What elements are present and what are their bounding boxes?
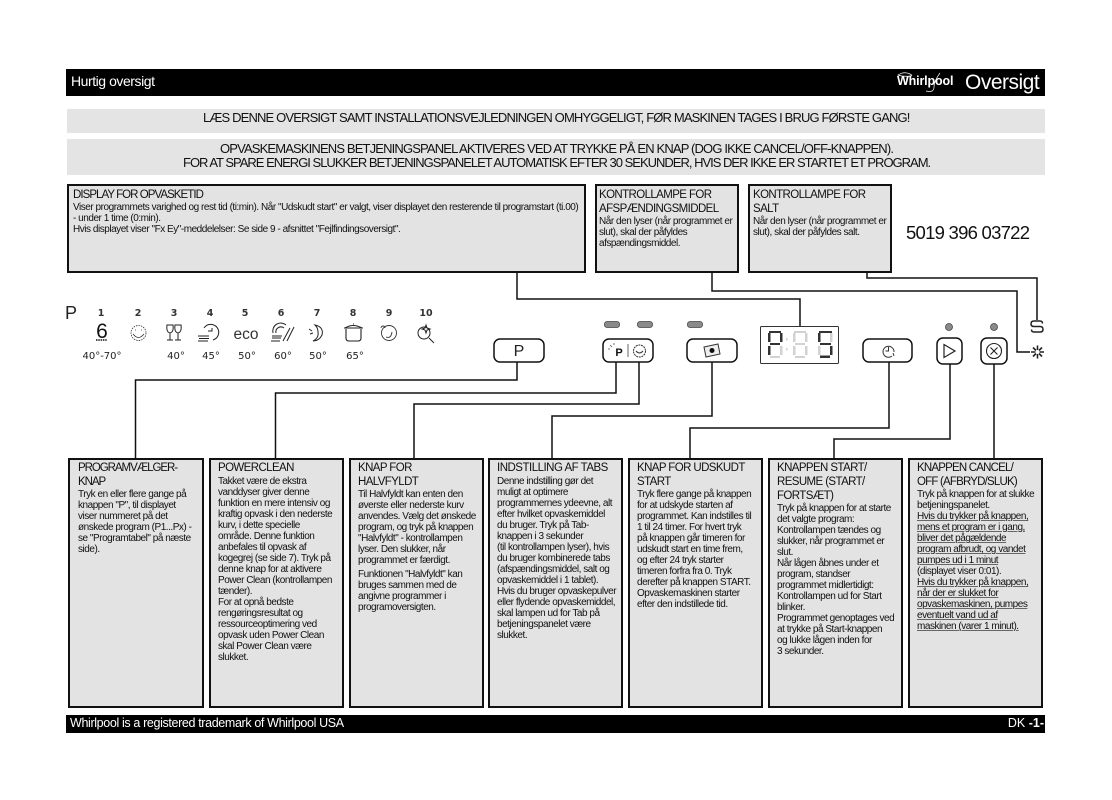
program numbers: 7 [314,308,320,319]
program numbers: 6 [278,308,285,319]
panel text: vanddyser giver denne [218,487,309,498]
display [760,326,838,364]
button: start [937,338,962,364]
panel text: kraftig opvask i den nederste [218,509,332,520]
button: delay [863,339,912,362]
panel text: Kontrollampen tændes og [777,525,881,536]
panel text [78,488,192,555]
panel text: på knappen går timeren for [637,533,745,544]
panel text: og efter 24 tryk starter [637,555,724,566]
connector: half load [414,362,639,458]
panel text: slut), skal der påfyldes [599,227,687,238]
button: cancel [981,338,1007,364]
program numbers: 9 [386,308,392,319]
connector: power clean [276,362,616,458]
header bar [66,69,1045,96]
panel text: blinker. [777,602,805,613]
panel heading [637,462,746,488]
button: P [494,339,544,362]
panel heading: KONTROLLAMPE FOR [599,189,711,201]
icon: salt S [1031,321,1043,332]
panel text: slukket. [497,630,527,641]
icon: program 9 plate with bubbles [381,326,396,340]
connector: salt panel to S [867,273,1037,320]
panel text: eventuelt vand ud af [917,610,998,621]
panel text: kogegrej (se side 7). Tryk på [218,553,331,564]
panel text: Opvaskemaskinen starter [637,588,740,599]
panel text: Tryk på knappen for at slukke [917,489,1034,500]
panel: power clean [209,458,344,708]
program row label: P [65,303,77,323]
panel text: Hvis displayet viser "Fx Ey"-meddelelser: Se side 9 - afsnittet "Fejlfindingsoversigt". [73,224,400,235]
program temperatures: 50° [238,351,256,362]
panel text: lyser. Den slukker, når [358,544,446,555]
panel: rinse aid lamp [595,184,739,273]
panel heading: KNAP FOR [358,462,412,474]
panel heading [917,462,1017,488]
panel text: rengøringsresultat og [218,608,303,619]
Whirlpool logo: Whirlpool [897,74,953,88]
program temperatures: 40°-70° [82,351,122,362]
panel text: side). [78,544,100,555]
panel text: viser nummeret på det [78,511,168,522]
icon: rinse aid star [1031,346,1044,358]
panel text: program, standser [777,569,850,580]
program temperatures: 45° [202,351,220,362]
panel heading [78,462,178,488]
connector: display panel to display [517,273,800,326]
panel heading: HALVFYLDT [358,476,418,488]
panel text: slukket. [218,652,248,663]
panel heading: KONTROLLAMPE FOR [753,189,865,201]
icon: program 10 magnifier [418,325,434,343]
panel heading: RESUME (START/ [777,476,865,488]
notice text: LÆS DENNE OVERSIGT SAMT INSTALLATIONSVEJLEDNINGEN OMHYGGELIGT, FØR MASKINEN TAGES I BRUG FØRSTE GANG! [203,110,910,125]
panel text [917,488,1034,632]
icon: program 3 glasses [167,325,181,340]
panel text: område. Denne funktion [218,531,314,542]
panel text: derefter på knappen START. [637,577,751,588]
panel text [753,216,887,238]
panel text: For at opnå bedste [218,597,294,608]
icon: program 4 plate [198,324,219,341]
panel heading: KNAPPEN START/ [777,462,867,474]
panel text: muligt at optimere [497,487,568,498]
panel text: maskinen (varer 1 minut). [917,621,1019,632]
connector: cancel [993,364,995,458]
panel text [73,202,578,235]
panel heading [753,189,866,215]
connector: rinse aid panel to star [712,273,1030,352]
panel text: funktion en mere intensiv og [218,498,330,509]
panel heading: PROGRAMVÆLGER- [78,462,177,474]
button: half load and power clean [603,339,653,362]
panel text: eller flydende opvaskemiddel, [497,597,615,608]
panel: tab setting [488,458,623,708]
icon: program 6 plates and cutlery [271,323,294,341]
panel text: Kontrollampen ud for Start [777,591,882,602]
panel: delayed start [628,458,763,708]
program temperatures: 40° [167,351,185,362]
panel text: Hvis du trykker på knappen, [917,577,1028,588]
panel text: Når lågen åbnes under et [777,558,879,569]
panel text: at trykke på Start-knappen [777,624,882,635]
icon: program 8 pot [344,324,363,341]
panel text: øverste eller nederste kurv [358,500,464,511]
panel text: - under 1 time (0:min). [73,213,161,224]
notice text line 2: FOR AT SPARE ENERGI SLUKKER BETJENINGSPANELET AUTOMATISK EFTER 30 SEKUNDER, HVIS DER IKKE ER STARTET ET PROGRAM. [183,155,930,170]
program temperatures: 60° [274,351,292,362]
panel text: og lukke lågen inden for [777,635,872,646]
panel text: programmet er færdigt. Funktionen "Halvfyldt" kan [358,555,462,580]
panel: program selector [68,458,204,708]
panel text: 3 sekunder. [777,646,824,657]
button: half load and power clean: P [615,347,623,359]
footer bar [66,715,1045,733]
panel text: (afspændingsmiddel, salt og [497,564,609,575]
panel heading: KNAPPEN CANCEL/ [917,462,1013,474]
panel text: det valgte program: [777,514,854,525]
panel: start resume [768,458,903,708]
panel text: anbefales til opvask af [218,542,306,553]
panel heading: KNAP FOR UDSKUDT [637,462,745,474]
panel text: bliver det pågældende [917,533,1006,544]
panel text: Hvis du trykker på knappen, [917,511,1028,522]
panel text: bruges sammen med de [358,580,456,591]
panel text: Når den lyser (når programmet er [753,216,886,227]
panel text: Power Clean (kontrollampen [218,575,332,586]
panel text: pumpes ud i 1 minut [917,555,998,566]
panel text [777,502,894,657]
panel text: programoversigten. [358,602,436,613]
panel text: Tryk en eller flere gange på [78,489,186,500]
panel text: opvaskemaskinen, pumpes [917,599,1027,610]
panel text: programmernes ydeevne, alt [497,498,612,509]
panel text: Programmet genoptages ved [777,613,894,624]
connector: tab [552,362,712,458]
program numbers: 8 [350,308,357,319]
panel heading [358,462,418,488]
panel: cancel off [908,458,1043,708]
panel text: Takket være de ekstra [218,476,307,487]
panel text: efter hvilket opvaskemiddel [497,509,605,520]
panel text: slukker, når programmet er [777,536,884,547]
panel heading: KNAP [78,476,105,488]
panel text: Viser programmets varighed og rest tid (ti:min). Når "Udskudt start" er valgt, viser displayet den resterende til programstart (ti.00) [73,202,578,213]
button: tab [687,339,737,362]
panel text: udskudt start en time frem, [637,544,743,555]
header title: Hurtig oversigt [71,73,155,89]
panel heading [777,462,868,502]
panel text: efter den indstillede tid. [637,599,728,610]
indicator LEDs [604,322,998,330]
icon: program 2 smile [131,326,146,340]
panel heading: SALT [753,203,779,215]
panel text: Hvis du bruger opvaskepulver [497,586,616,597]
panel heading [599,189,719,215]
connector: P button [136,362,517,458]
connector: delay [690,362,889,458]
panel: half load [349,458,484,708]
program numbers: 4 [207,308,214,319]
icon: program 5 eco: eco [234,326,258,343]
panel heading: POWERCLEAN [218,462,294,474]
program numbers: 10 [419,308,433,319]
part number: 5019 396 03722 [906,222,1029,243]
panel text: knappen "P", til displayet [78,500,176,511]
panel text: Tryk flere gange på knappen [637,489,751,500]
program temperatures [82,351,364,362]
panel text: program, og tryk på knappen [358,522,473,533]
panel text: du bruger kombinerede tabs [497,553,610,564]
program numbers [98,308,433,319]
panel text: slut. [777,547,793,558]
panel text: 1 til 24 timer. For hvert tryk [637,522,741,533]
panel text: "Halvfyldt" - kontrollampen [358,533,462,544]
panel text [599,216,733,249]
panel text: Når den lyser (når programmet er [599,216,732,227]
panel text: opvask uden Power Clean [218,630,324,641]
notice text line 1: OPVASKEMASKINENS BETJENINGSPANEL AKTIVERES VED AT TRYKKE PÅ EN KNAP (DOG IKKE CANCEL/OFF-KNAPPEN). [220,141,893,156]
panel text: betjeningspanelet. [917,500,990,511]
program temperatures: 50° [309,351,327,362]
panel text: Til Halvfyldt kan enten den [358,489,463,500]
button: P: P [514,343,524,360]
panel text: (displayet viser 0:01). [917,566,1001,577]
panel text: betjeningspanelet være [497,619,591,630]
panel: salt lamp [748,184,892,273]
program temperatures: 65° [346,351,364,362]
panel text: se "Programtabel" på næste [78,533,191,544]
panel text: når der er slukket for [917,588,998,599]
panel heading: FORTSÆT) [777,490,833,502]
page number: DK -1- [1008,716,1044,730]
connector: start [834,364,950,458]
panel text: (til kontrollampen lyser), hvis [497,542,609,553]
icon: program 1 sixth sense: 6 [96,320,108,343]
program numbers: 5 [242,308,248,319]
panel text: skal Power Clean være [218,641,312,652]
panel text [358,489,476,613]
panel text: program afbrudt, og vandet [917,544,1025,555]
panel text: ønskede program (P1...Px) - [78,522,191,533]
panel text: timeren forfra fra 0. Tryk [637,566,731,577]
trademark text: Whirlpool is a registered trademark of Whirlpool USA [70,716,344,730]
panel text: afspændingsmiddel. [599,238,680,249]
panel text: opvaskemiddel i 1 tablet). [497,575,598,586]
panel text: knappen i 3 sekunder [497,531,583,542]
panel text [497,476,616,641]
panel text: angivne programmer i [358,591,446,602]
panel heading: INDSTILLING AF TABS [497,462,608,474]
panel text: skal lampen ud for Tab på [497,608,600,619]
panel text: programmet midlertidigt: [777,580,874,591]
panel text: mens et program er i gang, [917,522,1025,533]
panel text [218,476,332,663]
panel heading: DISPLAY FOR OPVASKETID [73,189,203,201]
program numbers: 1 [98,308,104,319]
logo swoosh [898,72,940,92]
display digit segments [768,331,832,358]
panel text: for at udskyde starten af [637,500,733,511]
notice bar: read overview [67,109,1045,133]
panel text: programmet. Kan indstilles til [637,511,751,522]
panel text: tænder). [218,586,252,597]
panel text: slut), skal der påfyldes salt. [753,227,860,238]
panel: display [67,184,586,273]
panel text: denne knap for at aktivere [218,564,321,575]
panel text: du bruger. Tryk på Tab- [497,520,589,531]
panel text [637,488,752,610]
program numbers: 3 [171,308,177,319]
panel heading: START [637,476,671,488]
icon: program 7 crescent plate [309,325,322,341]
panel heading: OFF (AFBRYD/SLUK) [917,476,1017,488]
panel text: anvendes. Vælg det ønskede [358,511,476,522]
panel heading: AFSPÆNDINGSMIDDEL [599,203,719,215]
header section name: Oversigt [965,71,1039,94]
panel text: Tryk på knappen for at starte [777,503,891,514]
panel text: kurv, i dette specielle [218,520,300,531]
panel text: ressourceoptimering ved [218,619,317,630]
panel text: Denne indstilling gør det [497,476,593,487]
program numbers: 2 [135,308,141,319]
notice bar: control panel activation [67,139,1045,175]
